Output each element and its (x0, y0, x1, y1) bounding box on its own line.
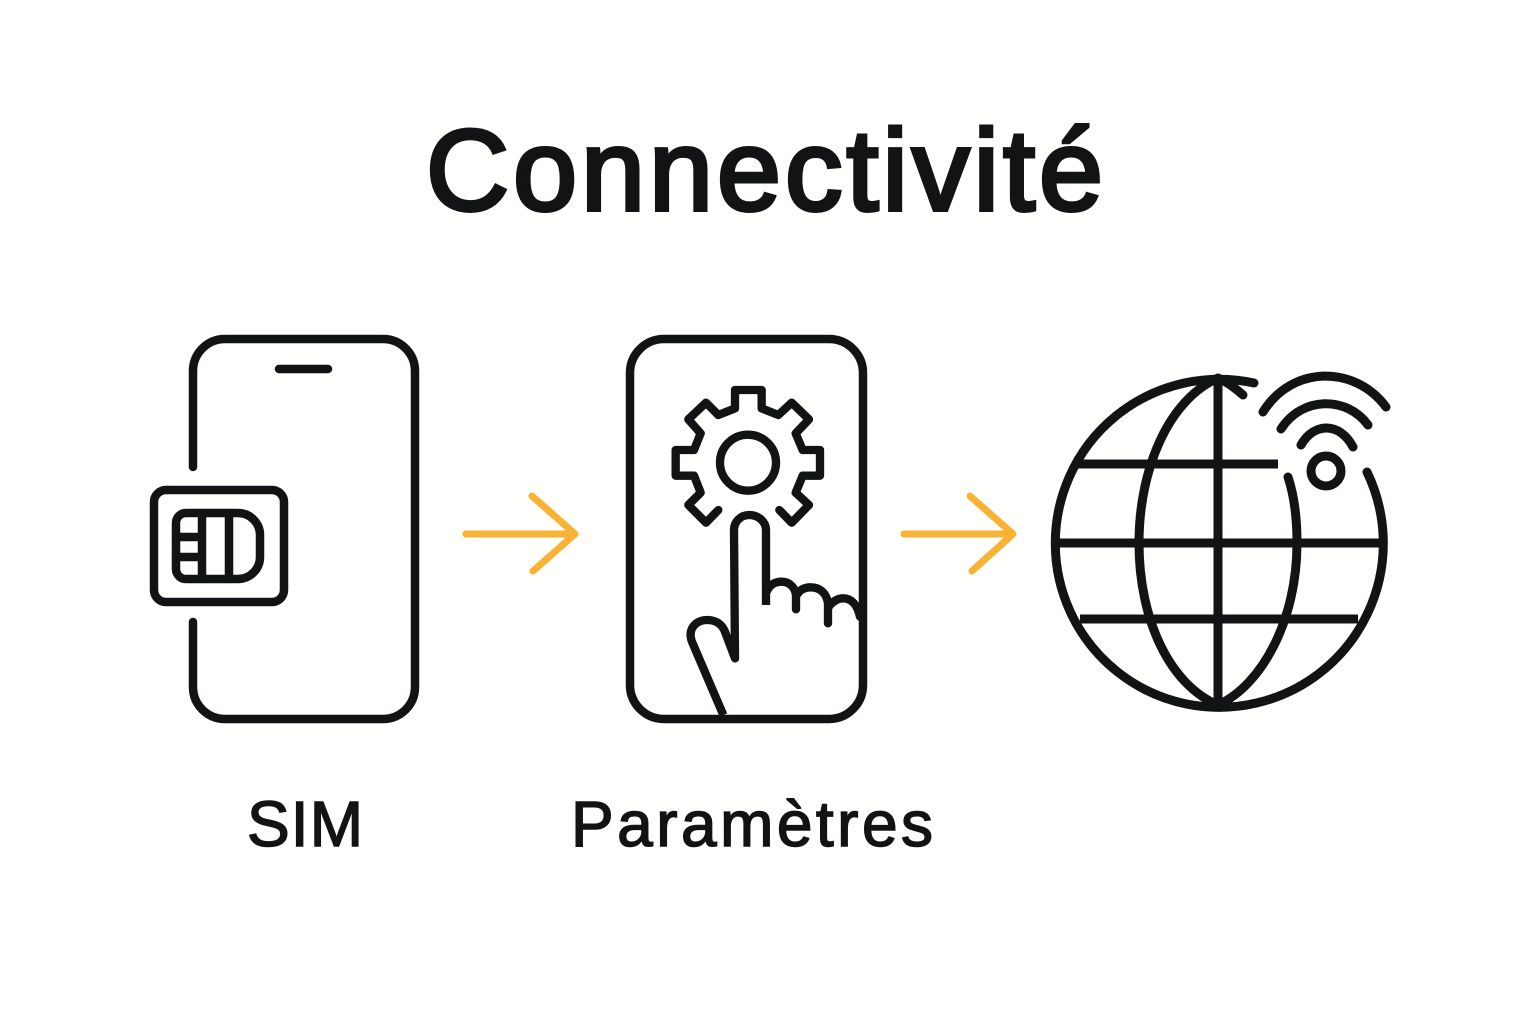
icon: globe with wifi signal (1055, 376, 1386, 707)
arrow: SIM to settings (466, 496, 575, 571)
globe parallels (1056, 464, 1380, 619)
phone outline (630, 339, 863, 719)
label: SIM: SIM (247, 788, 363, 860)
label: Paramètres: Paramètres (571, 788, 933, 860)
SIM card (154, 490, 284, 602)
phone outline (193, 339, 415, 719)
gear (676, 390, 820, 523)
pointing hand (691, 515, 860, 715)
wifi signal (1263, 376, 1386, 486)
icon: phone with SIM card (154, 339, 415, 719)
globe outline (1055, 379, 1383, 707)
phone speaker (279, 365, 328, 373)
arrow: settings to globe (904, 496, 1013, 571)
globe meridians (1139, 378, 1297, 705)
icon: phone with gear and pointing hand (630, 339, 863, 719)
title: Connectivité (426, 107, 1103, 235)
